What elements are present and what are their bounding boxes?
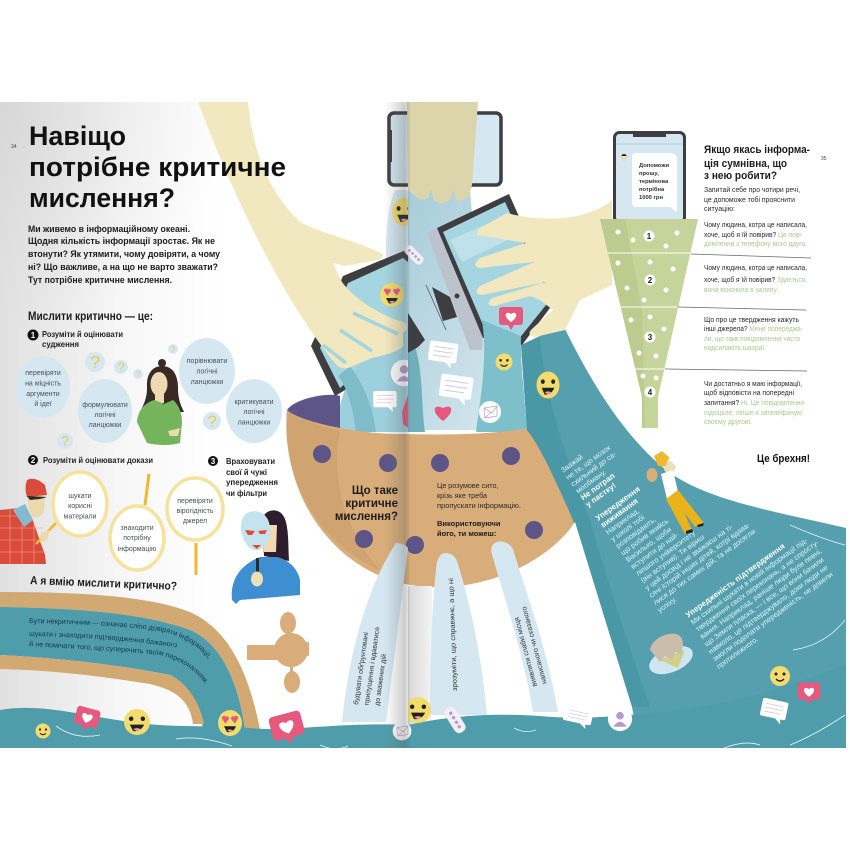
question 4: своєму другові.: [704, 417, 752, 426]
item 2 heading: 2: [31, 456, 36, 465]
icon: big heart bubble: [268, 710, 307, 748]
bubble: formulate chains: формулювати: [82, 402, 128, 409]
question 3: Що про це твердження кажуть: [704, 315, 799, 324]
teal text: warning and survivorship bias: Зважай: [559, 452, 585, 475]
illustration: elephant on globe: [645, 634, 697, 680]
teal text: warning and survivorship bias: у пастку!: [584, 481, 618, 509]
icon: pink heart bubble: [499, 307, 523, 330]
teal text: warning and survivorship bias: схильний до са-: [569, 449, 618, 488]
teal text: confirmation bias: Ми схильні шукати в новій інформації під-: [689, 535, 810, 626]
icon: chat bubble lower: [438, 373, 474, 406]
icon: pink fragment at the fold: [402, 395, 408, 428]
illustration: right tablet: [437, 194, 556, 432]
question 1: Чому людина, котра це написала,: [704, 220, 807, 229]
item 3 heading: упередження: [226, 478, 278, 487]
bubble: compare chains: порівнювати: [187, 357, 227, 365]
funnel divider lines: [665, 254, 811, 371]
teal text: warning and survivorship bias: (він вступив). Ти віриш: [639, 532, 706, 585]
curved pipe text: шукати і знаходити підтвердження бажаного: [30, 632, 177, 648]
question 4: Чи достатньо я маю інформації,: [704, 379, 802, 388]
icon: person circle on stream: [390, 360, 408, 386]
magnifier: check source credibility: [167, 478, 223, 575]
intro text: ні? Що важливе, а на що не варто зважати?: [28, 262, 218, 272]
teal text: warning and survivorship bias: розповідають,: [614, 515, 658, 550]
conclusion: this is a lie: Це брехня!: [757, 453, 810, 465]
question 1: [704, 220, 807, 248]
bowl text: description: крізь яке треба: [437, 491, 487, 500]
item 3 heading: чи фільтри: [226, 489, 267, 498]
bowl text: description: пропускати інформацію.: [437, 501, 521, 510]
bubble: test arguments: на міцність: [25, 380, 61, 388]
teal text: warning and survivorship bias: сячі історій інших дітей, котрі вдава-: [647, 520, 752, 600]
icon: envelope on water: [393, 722, 411, 740]
icon: pink heart: [435, 407, 451, 421]
intro right: [704, 185, 800, 213]
illustration: middle information stream: [408, 190, 530, 432]
bubble: formulate chains: логічні: [94, 411, 116, 419]
question 2: вона вскочила в халепу.: [704, 285, 778, 294]
illustration: bowl rim inner: [287, 395, 340, 440]
fold shadow: [384, 102, 410, 748]
sieve leg text left: до зважених дій: [373, 654, 388, 706]
phone with scam message: прошу,: [639, 171, 659, 177]
question 2: [704, 263, 807, 294]
question 1: домлення з телефону мого друга.: [704, 239, 807, 248]
heading: doubtful information: ція сумнівна, що: [704, 158, 787, 170]
question 3: надсилають шахраї.: [704, 343, 766, 352]
teal text: warning and survivorship bias: ліпшого університету: [634, 528, 697, 578]
curved pipe text: й не помічати того, що суперечить твоїм переконанням.: [30, 640, 207, 684]
icon: dots tag on water: [442, 705, 468, 735]
intro right: це допоможе тобі прояснити: [704, 195, 795, 204]
teal text: confirmation bias: протилежного.: [715, 635, 760, 671]
magnifier: find useful materials: шукати: [68, 493, 92, 500]
curved pipe text: Бути некритичним — означає сліпо довіряти інформації,: [30, 618, 211, 659]
item 1 heading: Розуміти й оцінювати: [42, 330, 123, 339]
bubble: test arguments: й ідеї: [34, 400, 52, 408]
sieve leg text middle: зрозуміти, що справжнє, а що ні: [447, 578, 459, 691]
heading: doubtful information: [704, 144, 810, 182]
teal text: confirmation bias: [680, 524, 846, 671]
icon: smiley right: [770, 666, 790, 686]
icon: chat bubble left: [373, 391, 397, 412]
magnifier: find useful materials: матеріали: [64, 512, 97, 520]
icon: heart-eyes on tablet: [380, 283, 404, 307]
bubble: critique chains: ланцюжки: [238, 420, 270, 426]
illustration: big teal stream on the right: [521, 325, 846, 748]
heading: doubtful information: Якщо якась інформа-: [704, 144, 810, 156]
illustration: sieve bowl: [286, 410, 575, 587]
icon: chat on water: [562, 705, 594, 730]
bubble: test arguments: аргументи: [26, 391, 60, 398]
question 4: підозріле, ліпше я зателефоную: [704, 408, 802, 417]
teal text: warning and survivorship bias: Не потрап: [579, 471, 617, 502]
teal text: warning and survivorship bias: лися до тих самих дій, та не досягли: [651, 527, 757, 607]
question 4: [704, 379, 804, 426]
phone with scam message: [614, 132, 684, 222]
heading: doubtful information: з нею робити?: [704, 170, 777, 182]
illustration: top phone: [388, 113, 501, 185]
magnifier: check source credibility: вірогідність: [176, 507, 214, 515]
curved pipe text: [30, 618, 211, 684]
phone with scam message: потрібна: [639, 186, 665, 193]
illustration: water pipe: [0, 592, 261, 735]
bowl text: description: [437, 481, 521, 538]
question 2: Чому людина, котра це написала,: [704, 263, 807, 272]
icon: small smiley: [36, 724, 50, 738]
icon: laughing smiley: [124, 709, 150, 735]
phone with scam message: термінова: [639, 179, 669, 185]
illustration: right hand: [475, 200, 612, 337]
bubble: formulate chains: ланцюжки: [89, 422, 121, 429]
heading: do I think critically: А я вмію мислити критично?: [30, 575, 177, 593]
funnel: [600, 219, 698, 428]
magnifier: find useful materials: корисні: [68, 502, 92, 510]
illustration: tablet laptop bezel and camera: [426, 228, 483, 350]
page background: left page shading: [0, 102, 846, 748]
intro right: ситуацію:: [704, 204, 735, 213]
icon: heart bubble right: [798, 682, 820, 704]
magnifier: check source credibility: перевіряти: [177, 497, 213, 505]
intro text: Щодня кількість інформації зростає. Як не: [28, 236, 215, 246]
title: потрібне критичне: [29, 152, 286, 182]
item 1 heading: [28, 330, 123, 349]
teal text: warning and survivorship bias: Василько, щоби: [624, 525, 673, 564]
question 1: хоче, щоб я їй повірив? Це пові-: [704, 230, 803, 239]
funnel: 2: [648, 276, 653, 285]
bowl text: description: Використовуючи: [437, 519, 501, 528]
item 1 heading: 1: [31, 331, 36, 340]
sieve leg text left: припущення і вдаватися: [363, 626, 382, 706]
magnifier: find needed information: потрібну: [123, 534, 151, 542]
magnifier: find useful materials: [53, 472, 107, 536]
icon: chat bubble center: [427, 340, 459, 369]
item 3 heading: [208, 456, 278, 498]
teal text: warning and survivorship bias: у школі тобі: [609, 513, 647, 543]
bowl text: description: його, ти можеш:: [437, 529, 496, 538]
title: мислення?: [29, 183, 175, 213]
bubble: compare chains: логічні: [196, 368, 218, 376]
teal text: confirmation bias: вання. Наприклад, раніше люди були певні,: [698, 546, 823, 641]
subheading: Мислити критично — це:: [28, 311, 153, 323]
bubble: compare chains: [179, 338, 235, 404]
icon: heart-eyes smiley: [218, 710, 242, 736]
teal text: warning and survivorship bias: мообману.: [574, 467, 608, 495]
item 3 heading: Враховувати: [226, 457, 275, 466]
funnel: 3: [648, 333, 653, 342]
teal text: confirmation bias: Упередженість підтвердження: [684, 541, 787, 620]
icon: smiley small: [496, 354, 512, 370]
question 4: запитання? Ні. Це повідомлення: [704, 398, 804, 407]
intro text: Тут потрібне критичне мислення.: [28, 275, 172, 285]
intro right: Запитай себе про чотири речі,: [704, 185, 800, 194]
magnifier: find needed information: інформацію: [118, 545, 156, 553]
teal text: warning and survivorship bias: Упередження: [594, 484, 642, 523]
illustration: sieve leg middle: [430, 553, 487, 715]
icon: half smiley top: [392, 198, 408, 226]
question 3: інші джерела? Мене попереджа-: [704, 324, 803, 333]
teal text: warning and survivorship bias: виживання: [599, 496, 640, 530]
bowl text: heading: Що таке: [352, 485, 398, 497]
item 3 heading: 3: [211, 457, 216, 466]
icon: laughing smiley at the fold: [408, 697, 431, 723]
teal text: warning and survivorship bias: [556, 396, 762, 615]
teal text: confirmation bias: твердження своїх переконань, а не спросту-: [694, 538, 821, 633]
funnel: 4: [648, 388, 653, 397]
sieve leg text right: написаного чи сказаного: [521, 605, 549, 685]
illustration: sieve leg right: [491, 541, 558, 712]
bubble: critique chains: критикувати: [234, 399, 274, 406]
illustration: darker band of right stream: [521, 337, 650, 707]
illustration: arm and hand from the top left: [198, 102, 407, 368]
teal text: confirmation bias: змогли подолати упередженість, не довели: [711, 570, 835, 663]
page number 35: 35: [821, 156, 827, 162]
icon: person on water: [608, 707, 632, 731]
icon: chat dots: [403, 244, 425, 266]
illustration: woman with mask: [232, 510, 300, 604]
illustration: sieve leg left: [342, 543, 408, 722]
phone with scam message: 1000 грн: [639, 195, 663, 201]
intro text: [28, 224, 220, 285]
icon: envelope: [479, 401, 501, 423]
bowl text: heading: критичне: [345, 498, 398, 510]
illustration: left tablet: [311, 250, 425, 432]
icon: chat bubble right: [759, 698, 789, 725]
teal text: warning and survivorship bias: Наприклад,: [604, 506, 641, 537]
sieve leg text left: будувати обґрунтовані: [352, 631, 370, 705]
question 3: ли, що таке повідомлення часто: [704, 334, 800, 343]
illustration: water ripple lines: [56, 525, 845, 749]
item 2 heading: Розуміти й оцінювати докази: [43, 456, 153, 465]
title: Навіщо: [29, 121, 126, 151]
icon: heart bubble left: [72, 705, 101, 734]
teal text: confirmation bias: навколо, це підтверджувало, доки люди не: [706, 563, 829, 656]
illustration: white backdrop under the bowl: [408, 522, 640, 748]
magnifier: find needed information: [110, 474, 164, 570]
bubble: test arguments: [16, 356, 70, 418]
item 1 heading: судження: [42, 340, 79, 349]
question 3: [704, 315, 803, 352]
title: [29, 121, 286, 213]
magnifier: find needed information: знаходити: [120, 525, 154, 532]
icon: laughing smiley: [536, 372, 560, 398]
teal text: warning and survivorship bias: не те, що мозок: [564, 443, 613, 481]
illustration: top hand over phone: [407, 102, 478, 203]
teal text: warning and survivorship bias: що робив якийсь: [619, 516, 670, 557]
illustration: pale stream behind tablet: [386, 190, 408, 410]
page number 34: 34: [11, 144, 17, 150]
illustration: thinking woman: [137, 359, 184, 445]
magnifier: check source credibility: джерел: [183, 518, 207, 525]
illustration: person carrying a light bulb: [646, 451, 704, 534]
bubble: formulate chains: [78, 379, 132, 443]
bubble: critique chains: [226, 379, 282, 443]
question mark icons: [57, 344, 221, 450]
question 4: щоб відповісти на попередні: [704, 388, 794, 397]
question 2: хоче, щоб я їй повірив? Здається,: [704, 275, 807, 284]
bowl text: heading: мислення?: [335, 511, 398, 523]
teal text: confirmation bias: що Земля пласка, — і все, що вони бачили: [702, 555, 825, 648]
illustration: pipe valve: [247, 612, 309, 693]
bubble: compare chains: ланцюжки: [191, 379, 223, 386]
illustration: fold shading below the bowl: [408, 586, 432, 726]
teal text: warning and survivorship bias: вступити до най-: [629, 530, 681, 571]
item 3 heading: свої й чужі: [226, 468, 267, 477]
bowl text: description: Це розумове сито,: [437, 481, 498, 490]
intro text: Ми живемо в інформаційному океані.: [28, 224, 190, 234]
illustration: water at the bottom: [0, 664, 846, 748]
teal text: warning and survivorship bias: успіху.: [656, 595, 678, 615]
bubble: test arguments: перевіряти: [25, 369, 61, 377]
intro text: втонути? Як утямити, чому довіряти, а чому: [28, 249, 220, 259]
bubble: critique chains: логічні: [243, 408, 265, 416]
phone with scam message: Допоможи: [639, 163, 669, 169]
funnel: 1: [647, 232, 652, 241]
illustration: man with magnifier: [0, 479, 56, 564]
teal text: warning and survivorship bias: у цей досвід і не зважаєш на ті-: [643, 522, 735, 592]
sieve leg text right: виявляти слабкі місця: [513, 616, 539, 688]
